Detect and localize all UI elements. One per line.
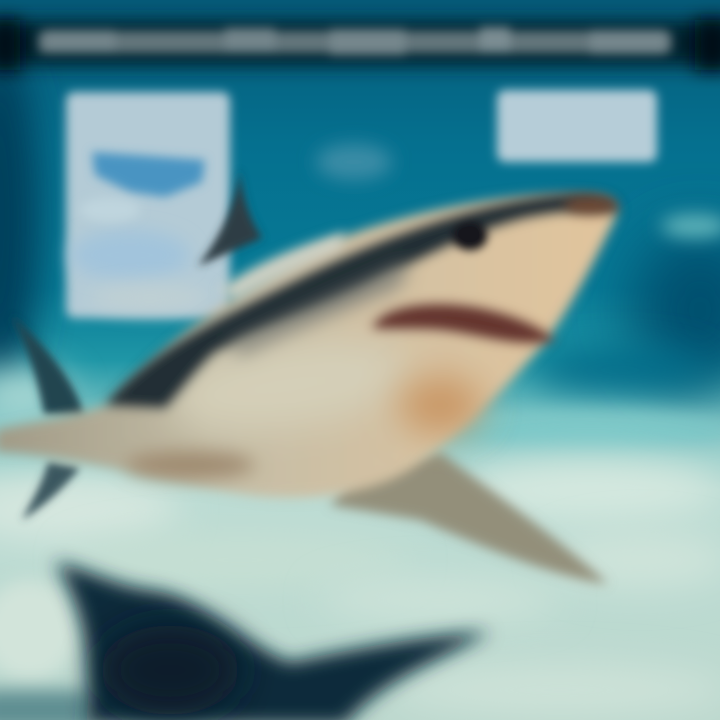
shark: dark back stripe [105, 194, 618, 408]
shark: grey transition under stripe [230, 262, 410, 355]
shark: lower flank markings [125, 451, 255, 479]
title banner [0, 20, 720, 70]
shark: pectoral fin [330, 452, 608, 584]
shark: pale belly highlight [165, 327, 415, 443]
shark: dorsal fin [198, 170, 262, 266]
shark: orange throat patch [398, 377, 482, 433]
shark: lower tail fin [22, 462, 80, 520]
shark: snout tip [564, 197, 616, 215]
panel lower text block [70, 230, 190, 280]
distant fish [661, 214, 720, 238]
panel graphic: blue shape [92, 152, 205, 197]
shark [0, 170, 618, 584]
panel: small faint centre label [316, 144, 392, 180]
shark: body [0, 194, 616, 498]
shark: mouth [372, 304, 556, 343]
shark: upper tail fin [12, 316, 84, 414]
shark shadow on sea floor [55, 562, 490, 720]
panel: left info card [66, 92, 230, 318]
shark: eye [452, 221, 488, 251]
shark: pale back highlight [220, 232, 345, 300]
title text block (illegible in reference) [38, 27, 672, 55]
panel: right info card [497, 90, 657, 162]
